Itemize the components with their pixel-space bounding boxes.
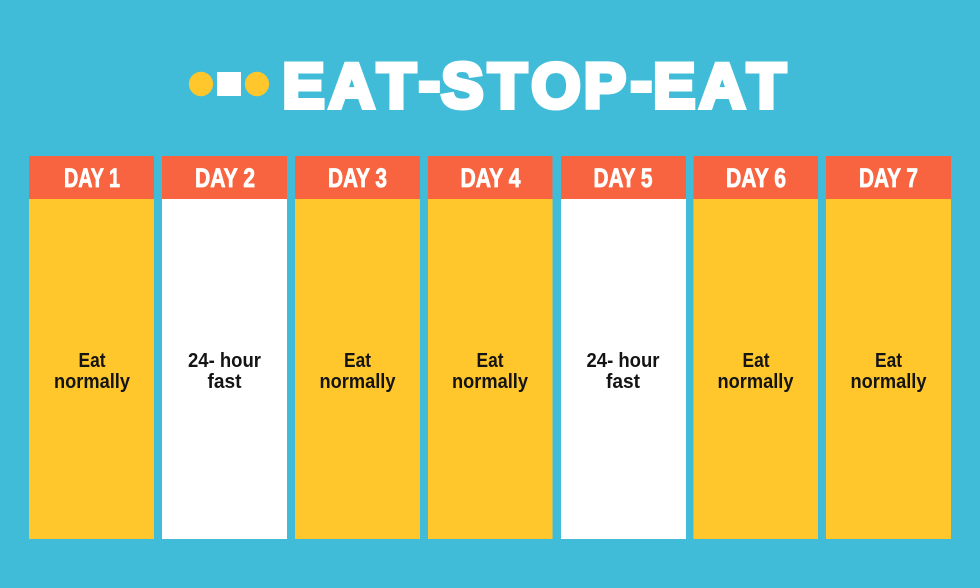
heading: day 7: DAY 7 (859, 163, 918, 193)
text: eat normally (320, 350, 396, 393)
panel: day 2 (162, 156, 287, 539)
text: eat normally: normally (850, 371, 927, 393)
icon: circle square circle (189, 72, 269, 96)
header bar (694, 156, 818, 199)
header bar (428, 156, 552, 199)
body: eat normally (694, 199, 818, 539)
heading: day 3: DAY 3 (328, 163, 387, 193)
text: eat normally: Eat (476, 350, 504, 372)
body: eat normally (428, 199, 552, 539)
text: eat normally: normally (54, 371, 131, 393)
header bar (29, 156, 154, 199)
panel: day 7 (826, 156, 951, 539)
text: eat normally: normally (320, 371, 396, 393)
body: fast (162, 199, 287, 539)
text: 24-hour fast (188, 350, 261, 393)
panel: day 4 (428, 156, 552, 539)
heading: day 6: DAY 6 (726, 163, 786, 193)
text: 24-hour fast: fast (606, 371, 640, 393)
panel: day 5 (561, 156, 686, 539)
text: eat normally (54, 350, 131, 393)
text: eat normally: Eat (875, 350, 902, 372)
heading: day 4: DAY 4 (460, 163, 520, 193)
text: 24-hour fast (586, 350, 660, 393)
text: eat normally: Eat (344, 350, 371, 372)
body: fast (561, 199, 686, 539)
text: eat normally: Eat (742, 350, 770, 372)
body: eat normally (29, 199, 154, 539)
text: eat normally: normally (452, 371, 529, 393)
text: eat normally: normally (718, 371, 794, 393)
text: eat normally: Eat (78, 350, 106, 372)
text: eat normally (850, 350, 927, 393)
heading: day 2: DAY 2 (195, 163, 255, 193)
body: eat normally (295, 199, 420, 539)
header bar (561, 156, 686, 199)
text: eat normally (452, 350, 529, 393)
panel: day 3 (295, 156, 420, 539)
body: eat normally (826, 199, 951, 539)
text: 24-hour fast: 24- hour (586, 350, 660, 372)
heading: day 5: DAY 5 (594, 163, 652, 193)
header bar (826, 156, 951, 199)
header bar (295, 156, 420, 199)
text: eat normally (718, 350, 794, 393)
title block (189, 47, 786, 122)
text: 24-hour fast: fast (208, 371, 242, 393)
heading: day 1: DAY 1 (64, 163, 120, 193)
title: EAT-STOP-EAT (282, 47, 786, 122)
panel: day 6 (694, 156, 818, 539)
panel: day 1 (29, 156, 154, 539)
header bar (162, 156, 287, 199)
text: 24-hour fast: 24- hour (188, 350, 261, 372)
